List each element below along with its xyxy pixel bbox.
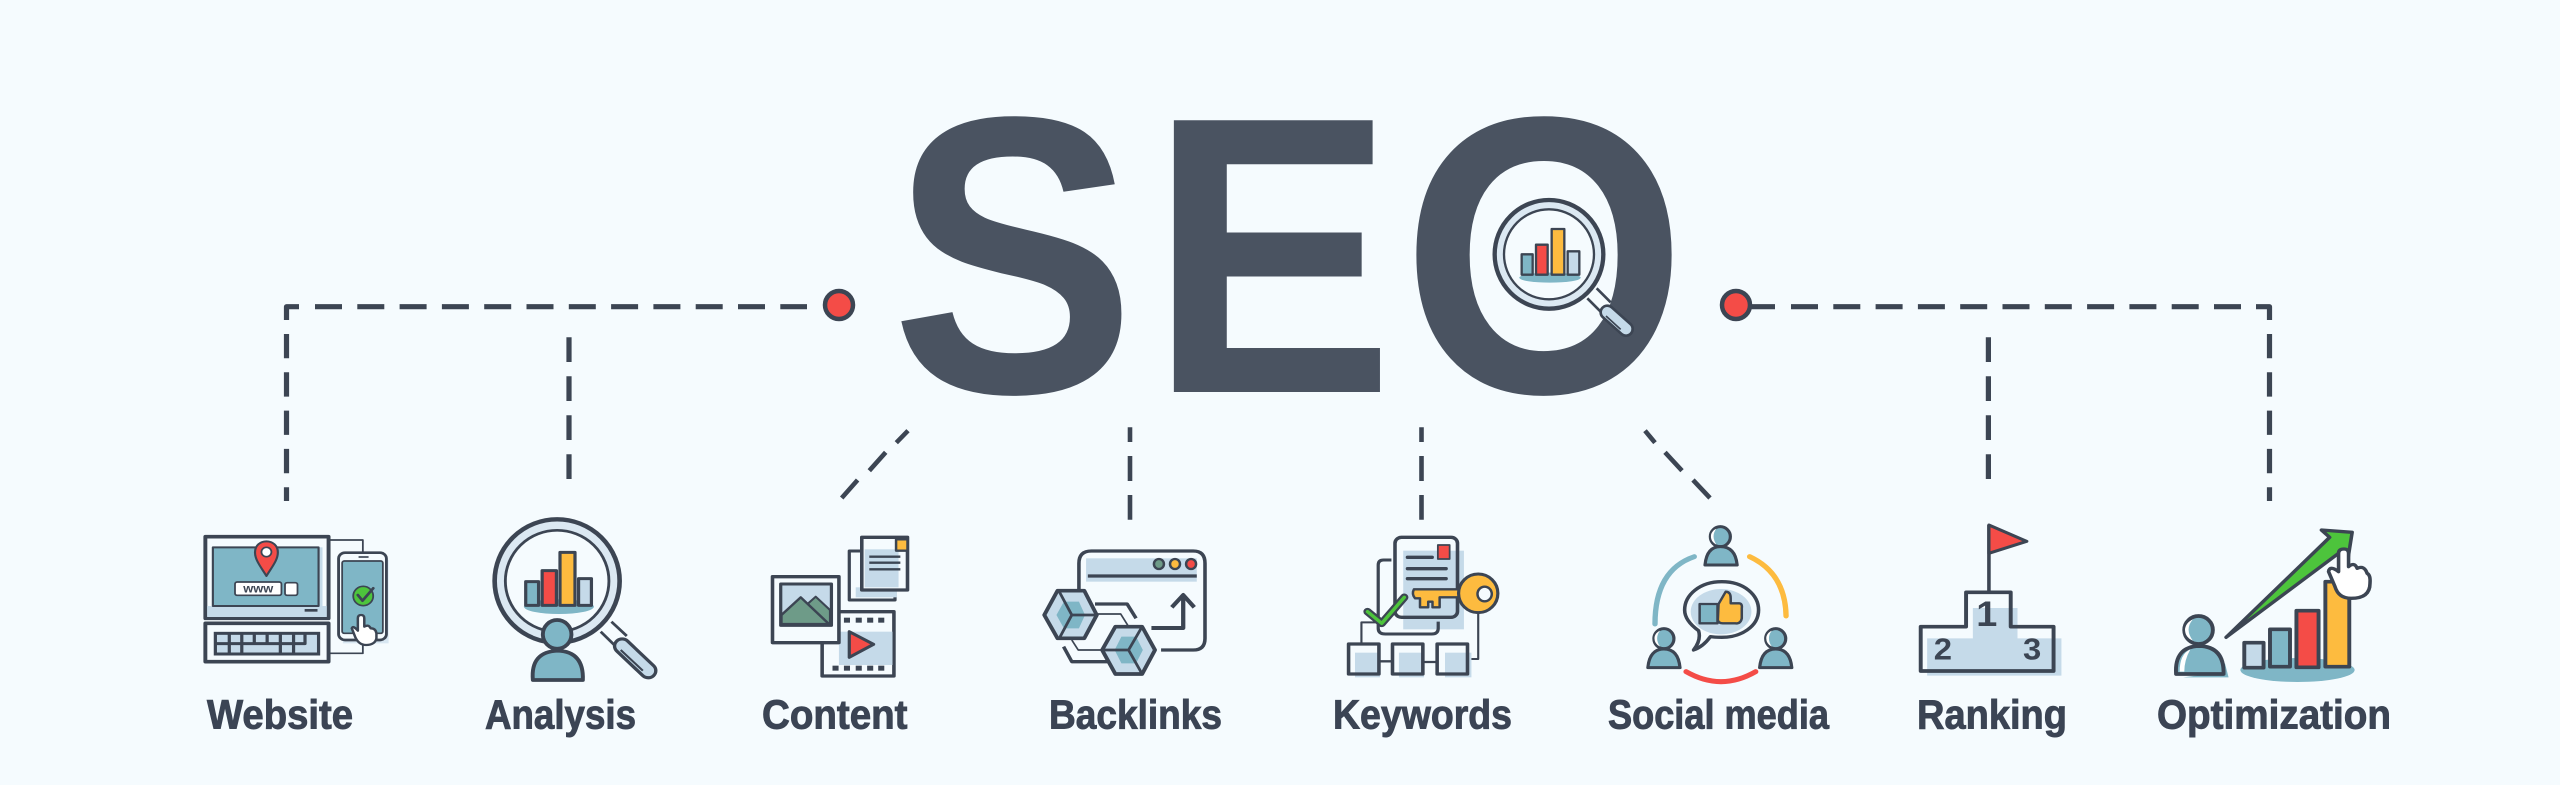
panel: Optimization	[2157, 530, 2391, 738]
icon: person, rising bars, arrow and hand	[2176, 530, 2370, 682]
label: Website: Website	[207, 692, 353, 738]
panel: Ranking	[1917, 525, 2067, 738]
icon: podium with flag: 3	[2023, 631, 2041, 666]
panel: Content	[762, 537, 908, 738]
label: Optimization: Optimization	[2157, 692, 2391, 738]
label: Ranking: Ranking	[1917, 692, 2067, 738]
panel: Keywords	[1333, 537, 1512, 738]
label: Analysis: Analysis	[485, 692, 636, 738]
panel: Analysis	[485, 519, 648, 738]
icon: person with magnifier	[495, 519, 648, 680]
icon: podium with flag: 2	[1934, 631, 1952, 666]
panel: Social media	[1608, 527, 1830, 738]
label: Backlinks: Backlinks	[1049, 692, 1222, 738]
connector: left dashed trunk and red dot	[286, 291, 853, 501]
icon: people around a speech bubble	[1648, 527, 1792, 682]
icon: podium with flag	[1921, 525, 2061, 676]
icon: browser window with linked cubes	[1044, 551, 1205, 674]
icon: magnifier with bar chart inside the O	[1495, 200, 1626, 329]
title: SEO: SEO	[891, 35, 1687, 476]
icon: computer and phone	[205, 537, 389, 662]
icon: document, key and check	[1349, 537, 1498, 677]
panel: Backlinks	[1044, 551, 1222, 738]
icon: computer and phone: www	[242, 582, 274, 596]
icon: podium with flag: 1	[1976, 594, 1997, 634]
label: Keywords: Keywords	[1333, 692, 1512, 738]
icon: documents, photo and video	[772, 537, 907, 676]
connector: right dashed trunk and red dot	[1722, 291, 2270, 501]
panel: Website	[205, 537, 389, 738]
connector: centre dashed lines under the title	[842, 427, 1710, 520]
label: Content: Content	[762, 692, 908, 738]
label: Social media: Social media	[1608, 692, 1830, 738]
